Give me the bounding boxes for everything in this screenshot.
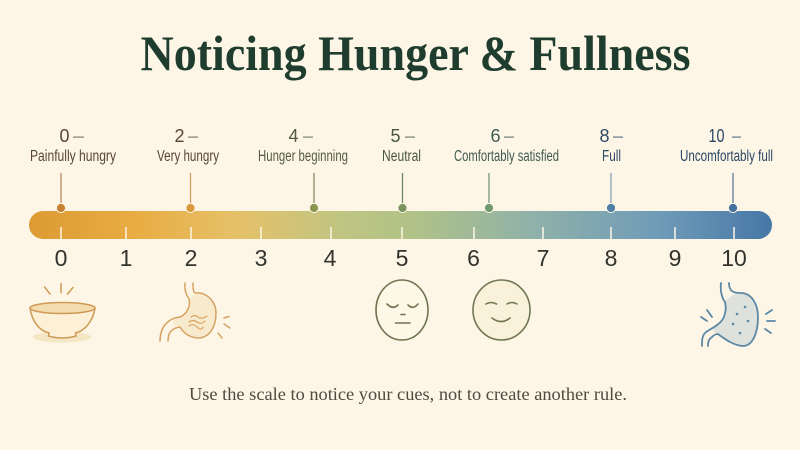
bar tick marks bbox=[61, 227, 734, 239]
axis numbers: 8 bbox=[605, 245, 617, 271]
label: 4 hunger beginning: Hunger beginning bbox=[258, 148, 348, 165]
label: 2 very hungry: 2 bbox=[174, 126, 185, 146]
label: 0 painfully hungry: Painfully hungry bbox=[30, 148, 116, 165]
label: 10 uncomfortably full: 10 bbox=[708, 126, 724, 146]
title: Noticing Hunger & Fullness bbox=[140, 25, 690, 81]
label: 6 comfortably satisfied: 6 bbox=[490, 126, 501, 146]
label: 5 neutral: Neutral bbox=[382, 148, 421, 165]
axis numbers: 1 bbox=[120, 245, 132, 271]
label: 5 neutral bbox=[382, 126, 421, 165]
marker 6 bbox=[484, 173, 494, 213]
axis numbers: 10 bbox=[721, 245, 747, 271]
label: 8 full bbox=[600, 126, 623, 165]
label: 2 very hungry: Very hungry bbox=[157, 148, 219, 165]
label: 0 painfully hungry bbox=[30, 126, 116, 165]
icon: overfull stomach bbox=[701, 283, 775, 346]
marker 2 bbox=[186, 173, 195, 213]
icon: satisfied face bbox=[473, 280, 530, 340]
axis numbers: 6 bbox=[467, 245, 480, 271]
label: 4 hunger beginning bbox=[258, 126, 348, 165]
gradient scale bar bbox=[29, 211, 772, 239]
marker 0 bbox=[56, 173, 66, 213]
label: 8 full: Full bbox=[602, 148, 621, 165]
axis numbers: 3 bbox=[255, 245, 267, 271]
axis numbers bbox=[55, 245, 747, 271]
icon: empty bowl bbox=[30, 284, 95, 342]
marker 10 bbox=[728, 173, 738, 213]
label: 8 full: 8 bbox=[600, 126, 610, 146]
label: 6 comfortably satisfied bbox=[454, 126, 559, 165]
icon: neutral face bbox=[376, 280, 428, 340]
axis numbers: 2 bbox=[185, 245, 197, 271]
leader markers bbox=[56, 173, 738, 213]
marker 5 bbox=[398, 173, 407, 213]
label: 2 very hungry bbox=[157, 126, 219, 165]
label: 4 hunger beginning: 4 bbox=[288, 126, 299, 146]
axis numbers: 9 bbox=[669, 245, 681, 271]
axis numbers: 7 bbox=[537, 245, 549, 271]
footer note: Use the scale to notice your cues, not to create another rule. bbox=[189, 384, 627, 404]
icon: hungry stomach bbox=[160, 283, 230, 341]
marker 4 bbox=[309, 173, 319, 213]
axis numbers: 0 bbox=[55, 245, 67, 271]
label: 6 comfortably satisfied: Comfortably satisfied bbox=[454, 148, 559, 165]
label: 0 painfully hungry: 0 bbox=[60, 126, 70, 146]
marker 8 bbox=[606, 173, 616, 213]
label: 5 neutral: 5 bbox=[390, 126, 401, 146]
axis numbers: 4 bbox=[324, 245, 337, 271]
scale labels bbox=[30, 126, 773, 165]
axis numbers: 5 bbox=[396, 245, 408, 271]
label: 10 uncomfortably full bbox=[680, 126, 773, 165]
